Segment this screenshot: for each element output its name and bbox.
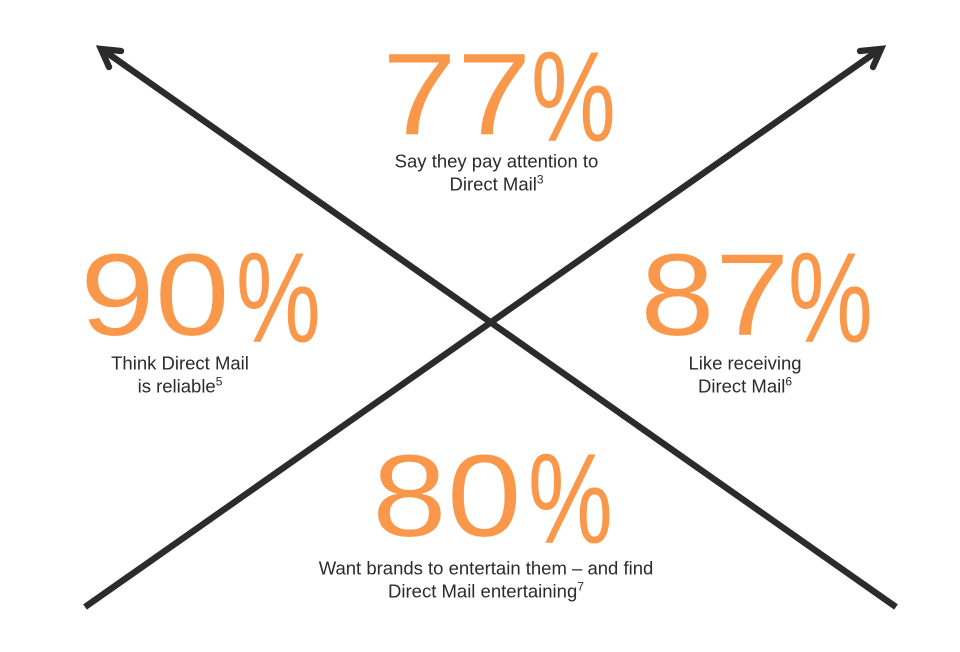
stat: 90% — [80, 226, 321, 396]
caption: 87%: Direct Mail — [698, 374, 792, 396]
caption: 80%: Want brands to entertain them – and find — [319, 558, 653, 578]
stat: 90%: % — [236, 226, 321, 369]
caption: 80%: 7 — [577, 580, 584, 594]
stat: 77%: % — [531, 25, 616, 168]
stat: 80%: 80 — [372, 430, 522, 561]
stat: 87% — [640, 226, 873, 396]
caption: 90%: 5 — [216, 374, 223, 388]
stat: 87%: 87 — [640, 229, 790, 360]
caption: 77%: Direct Mail — [449, 172, 544, 194]
caption: 87%: 6 — [785, 374, 792, 388]
caption: 77%: 3 — [537, 172, 544, 186]
caption: 80%: Direct Mail entertaining — [388, 580, 584, 602]
stat: 77%: 77 — [382, 29, 532, 160]
stat: 80%: % — [528, 427, 613, 570]
stat: 77% — [382, 25, 616, 194]
stat: 90%: 90 — [80, 229, 230, 360]
caption: 77%: Say they pay attention to — [395, 150, 598, 172]
stat: 87%: % — [788, 226, 873, 369]
arrow: bottom-right to top-left — [101, 49, 896, 607]
stat: 80% — [319, 427, 653, 602]
caption: 90%: is reliable — [138, 374, 223, 396]
caption: 90%: Think Direct Mail — [111, 352, 249, 374]
caption: 87%: Like receiving — [688, 352, 802, 374]
arrow: bottom-left to top-right — [85, 49, 881, 607]
